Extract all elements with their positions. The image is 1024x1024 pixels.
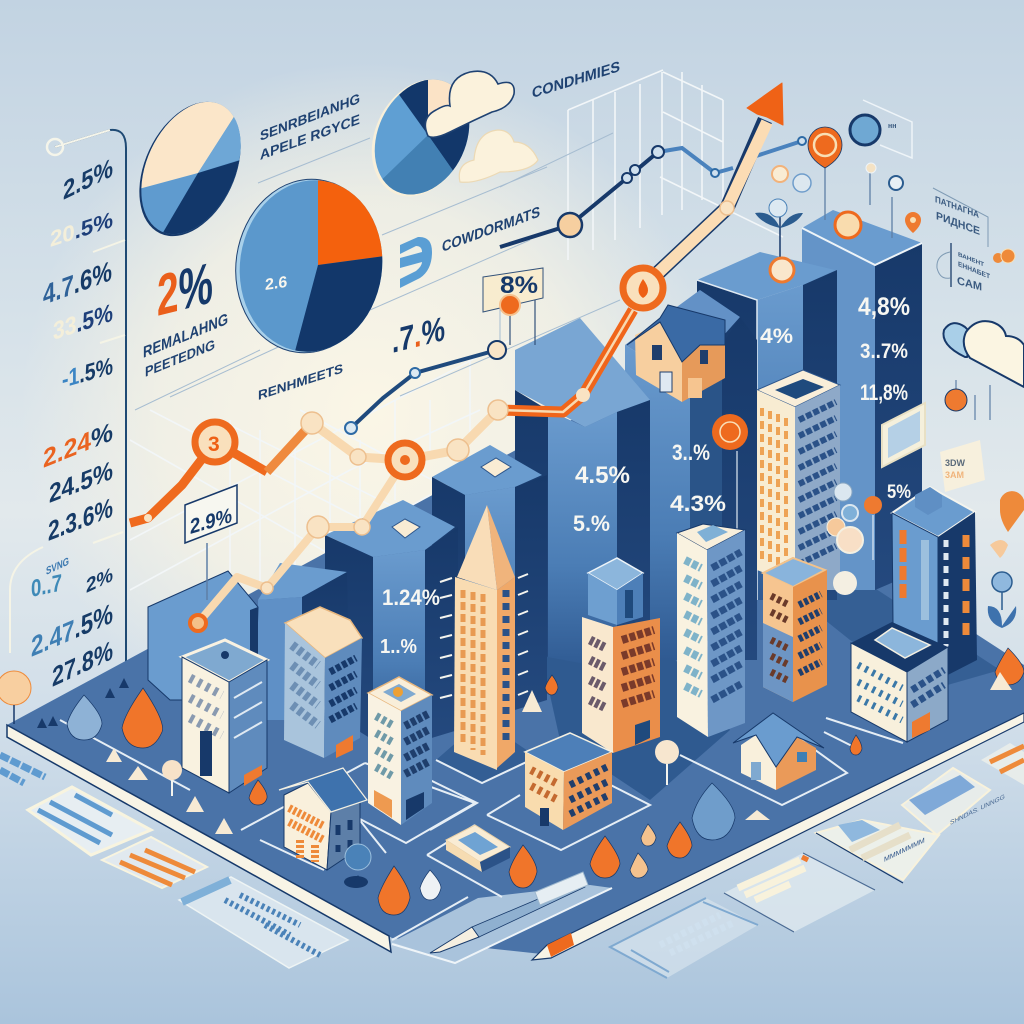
- top right note cards: ВАНЕНТ: [958, 251, 984, 269]
- building: orange low: [525, 733, 612, 830]
- label condinmies: CONDHMIES: [532, 58, 620, 102]
- left percentages: 33.5%: [53, 299, 113, 346]
- column percentages: 4.5%: [575, 462, 630, 489]
- back column 6: [325, 500, 458, 740]
- large pie chart: 2.6: [265, 273, 287, 294]
- column percentages: 4.3%: [670, 491, 726, 516]
- icon and label cowdormats: [400, 204, 540, 288]
- back column 1: [802, 210, 922, 590]
- trend line and arrow: 3: [208, 433, 220, 456]
- documents bottom right: [610, 743, 1024, 978]
- building: orange middle right: [763, 558, 827, 702]
- remaining label: [143, 309, 228, 381]
- pencil: [532, 713, 1024, 960]
- label renhmeets: RENHMEETS: [258, 361, 343, 403]
- left labels panel: [10, 130, 126, 694]
- top right note cards: ЕННАБЕТ: [958, 259, 991, 281]
- top right pins: [755, 115, 1015, 282]
- road outlines: [60, 718, 903, 940]
- back column 2: [697, 252, 837, 600]
- house: front left: [279, 768, 367, 870]
- sign 29%: 2.9%: [190, 503, 232, 539]
- top right note cards: ПАТНАГНА: [935, 194, 979, 220]
- left percentages: 4.7.6%: [43, 256, 112, 312]
- heading top: SENRBEIANHG: [260, 91, 360, 145]
- building: left: [182, 640, 267, 793]
- clouds: [425, 71, 538, 182]
- column percentages: 3..%: [672, 440, 710, 465]
- right card and icons: [882, 403, 1024, 628]
- pie chart top left: [139, 102, 241, 236]
- column percentages: 11,8%: [860, 380, 908, 405]
- left percentages: 2.5%: [63, 152, 113, 206]
- building: stepped orange and blue: [582, 558, 660, 753]
- orange trees: [122, 648, 1024, 915]
- dark trend line: [345, 137, 806, 434]
- documents bottom left: [0, 755, 348, 968]
- left percentages: [31, 152, 113, 694]
- left percentages: 0..7: [31, 570, 62, 603]
- back column 7: [258, 563, 350, 720]
- right card and icons: 3AM: [945, 470, 964, 480]
- column percentages: 1.24%: [382, 585, 440, 610]
- icon and label cowdormats: COWDORMATS: [442, 204, 540, 256]
- building: grey blue second: [284, 607, 362, 758]
- sign 8%: 8%: [500, 272, 538, 299]
- pin and bubbles near tower: [712, 414, 882, 595]
- perspective grid: [130, 70, 783, 640]
- top right note cards: [863, 100, 991, 294]
- heading top: APELE RGYCE: [260, 112, 360, 164]
- large pie chart: [235, 178, 382, 354]
- blue trees and balls: [0, 671, 735, 900]
- platform: [7, 398, 1024, 963]
- pen: [430, 872, 588, 953]
- documents bottom right: SHNDAS. UNNGG: [950, 794, 1005, 827]
- top right note cards: CAM: [957, 275, 982, 294]
- back column 3: [625, 290, 757, 660]
- back column 4: [515, 318, 650, 670]
- right clouds: [943, 321, 1024, 420]
- left percentages: SVNG: [46, 556, 69, 578]
- globe icon: [344, 844, 371, 888]
- left percentages: 2.3.6%: [48, 492, 113, 547]
- big 2%: 2%: [157, 251, 213, 329]
- top right note cards: РИДНСЕ: [936, 210, 980, 238]
- column percentages: [380, 293, 911, 658]
- left percentages: 27.8%: [52, 635, 113, 694]
- sign 8%: [483, 268, 543, 345]
- darker ground patches: [800, 587, 1000, 690]
- left percentages: 2%: [86, 563, 113, 598]
- trend line and arrow: [130, 83, 783, 631]
- column percentages: 5.%: [573, 511, 610, 536]
- right card and icons: 3DW: [945, 458, 966, 468]
- building: beige right: [851, 622, 948, 742]
- left percentages: 2.24%: [43, 417, 113, 474]
- right tower: [892, 487, 977, 680]
- house on column: [627, 305, 725, 402]
- left percentages: 20.5%: [50, 207, 113, 252]
- house: front right: [733, 713, 824, 790]
- column percentages: 5%: [887, 482, 911, 503]
- documents bottom right: MMMMMMM: [884, 836, 925, 864]
- tall tower centre-right: [757, 370, 840, 590]
- spire tower: [440, 505, 528, 770]
- sign 29%: [185, 485, 237, 600]
- column percentages: 3..7%: [860, 340, 908, 363]
- remaining label: PEETEDNG: [145, 337, 215, 381]
- pie chart top centre: [372, 80, 470, 196]
- low pool building: [446, 825, 510, 872]
- small triangles: [37, 672, 1012, 882]
- left percentages: -1.5%: [62, 353, 113, 394]
- back column 8: [148, 571, 258, 700]
- column percentages: 4,8%: [858, 293, 910, 321]
- left percentages: 2.47.5%: [31, 598, 113, 664]
- label .7%: .7.%: [392, 310, 445, 361]
- remaining label: REMALAHNG: [143, 309, 228, 362]
- column percentages: 4%: [760, 325, 793, 348]
- building: pale tower: [677, 524, 745, 737]
- back column 5: [432, 445, 547, 710]
- left percentages: 24.5%: [49, 455, 113, 509]
- top right note cards: нн: [888, 123, 896, 130]
- column percentages: 1..%: [380, 636, 417, 658]
- building: pale middle: [368, 677, 432, 825]
